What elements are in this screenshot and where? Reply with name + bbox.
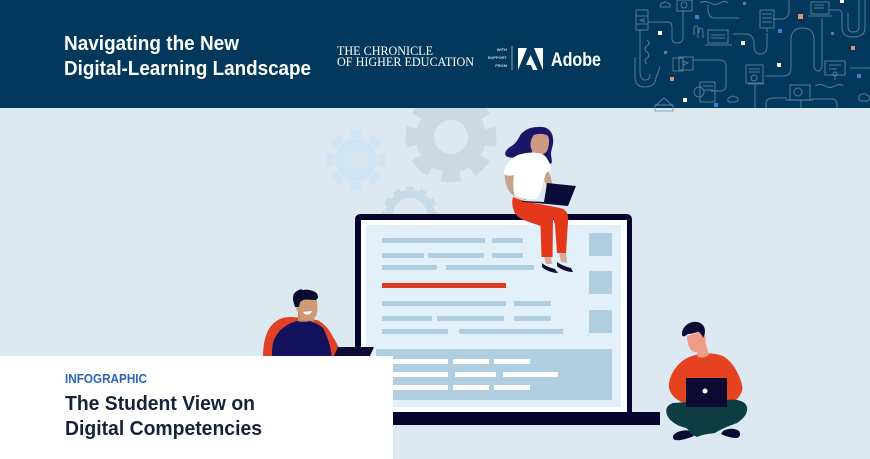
red highlight line [382, 283, 506, 288]
face [531, 134, 549, 159]
with support from label: WITH [497, 47, 507, 52]
category label: INFOGRAPHIC [65, 372, 147, 386]
hair [505, 127, 553, 164]
with support from label [488, 47, 508, 68]
laptop logo [702, 388, 708, 394]
smile [303, 311, 312, 315]
monitor base [340, 412, 660, 425]
neck [298, 312, 314, 322]
title: Digital-Learning Landscape [64, 58, 311, 80]
laptop [522, 183, 576, 206]
sweater [669, 353, 742, 407]
shoe right [557, 262, 573, 272]
hair [293, 289, 318, 307]
face [296, 298, 318, 320]
circuit pattern of e-learning icons [635, 0, 870, 111]
icon: small blue gear behind monitor [384, 189, 436, 241]
Adobe logo: Adobe [551, 50, 601, 71]
ankles [544, 252, 567, 264]
neck [696, 344, 709, 358]
card heading [65, 392, 262, 440]
face [687, 331, 706, 352]
laptop [686, 378, 727, 407]
Adobe logo [518, 48, 601, 71]
with support from label: SUPPORT [488, 55, 508, 60]
card heading: Digital Competencies [65, 417, 262, 440]
person: man cross-legged at right [666, 322, 747, 440]
screen text lines [382, 238, 563, 334]
shoes [542, 263, 558, 273]
chair [263, 317, 342, 358]
with support from label: FROM [495, 63, 508, 68]
title [64, 33, 311, 80]
icon: light blue gear [330, 134, 382, 186]
icon: grey gear [412, 98, 490, 176]
arm [505, 170, 528, 200]
header band [0, 0, 870, 111]
shoe right [721, 429, 740, 438]
Chronicle of Higher Education logo: OF HIGHER EDUCATION [337, 55, 474, 69]
shirt [504, 153, 551, 199]
card heading: The Student View on [65, 392, 255, 415]
pants [512, 197, 568, 257]
person: woman sitting on monitor [504, 127, 576, 273]
Chronicle of Higher Education logo: THE CHRONICLE [337, 44, 433, 58]
Chronicle of Higher Education logo [337, 44, 474, 69]
laptop monitor [340, 214, 660, 425]
shoes [673, 430, 694, 440]
laptop [333, 347, 374, 358]
blue content block [376, 349, 612, 400]
body [272, 321, 332, 358]
sidebar squares [589, 233, 612, 333]
legs [666, 400, 747, 437]
title: Navigating the New [64, 33, 239, 55]
infographic label card [0, 356, 393, 459]
divider [512, 46, 513, 70]
other arm [542, 168, 552, 186]
pattern dots [658, 0, 861, 107]
hair [682, 322, 705, 338]
person: man with laptop at left [263, 289, 374, 358]
